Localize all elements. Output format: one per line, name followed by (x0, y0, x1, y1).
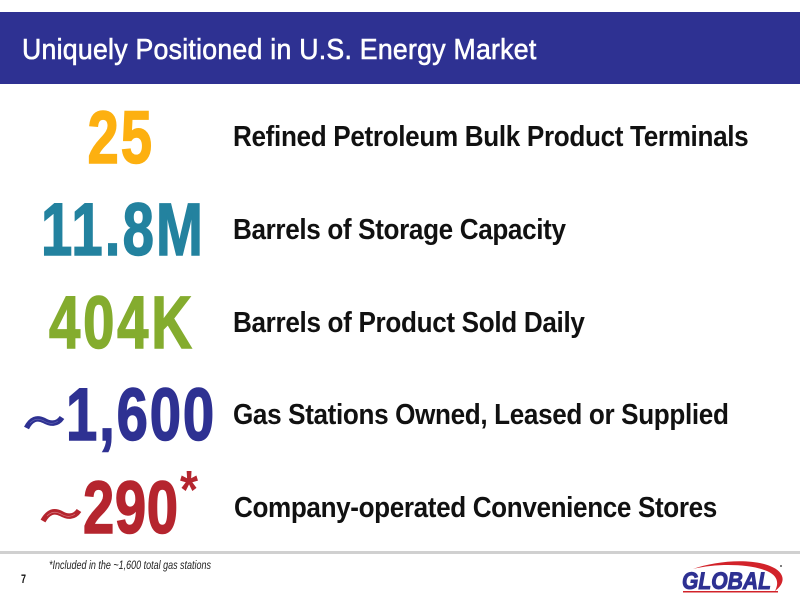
stat: gas stations: 1,600 (66, 374, 214, 456)
title: Uniquely Positioned in U.S. Energy Market (22, 33, 537, 65)
stat: terminals: Refined Petroleum Bulk Product Terminals (233, 120, 749, 152)
stat: product sold: 404K (49, 282, 192, 364)
icon: tilde (43, 510, 79, 521)
stat: terminals: 25 (88, 97, 152, 179)
title banner (0, 12, 800, 84)
stat: gas stations: Gas Stations Owned, Leased or Supplied (233, 398, 729, 430)
stat: storage capacity: 11.8M (41, 189, 203, 271)
page number: 7 (21, 572, 26, 586)
stat: convenience stores: 290 (83, 467, 178, 549)
stat: convenience stores (43, 460, 717, 549)
stat: convenience stores: Company-operated Convenience Stores (234, 491, 717, 523)
stat: storage capacity (41, 189, 567, 271)
stat: convenience stores: * (180, 460, 198, 520)
footnote: *Included in the ~1,600 total gas stations (49, 560, 211, 572)
stat: storage capacity: Barrels of Storage Capacity (233, 213, 567, 245)
stat: gas stations (26, 374, 729, 456)
stat: product sold: Barrels of Product Sold Daily (233, 306, 586, 338)
stat: product sold (49, 282, 586, 364)
icon: tilde (26, 418, 62, 428)
logo: Global: GLOBAL (682, 568, 771, 595)
stat: terminals (88, 97, 749, 179)
